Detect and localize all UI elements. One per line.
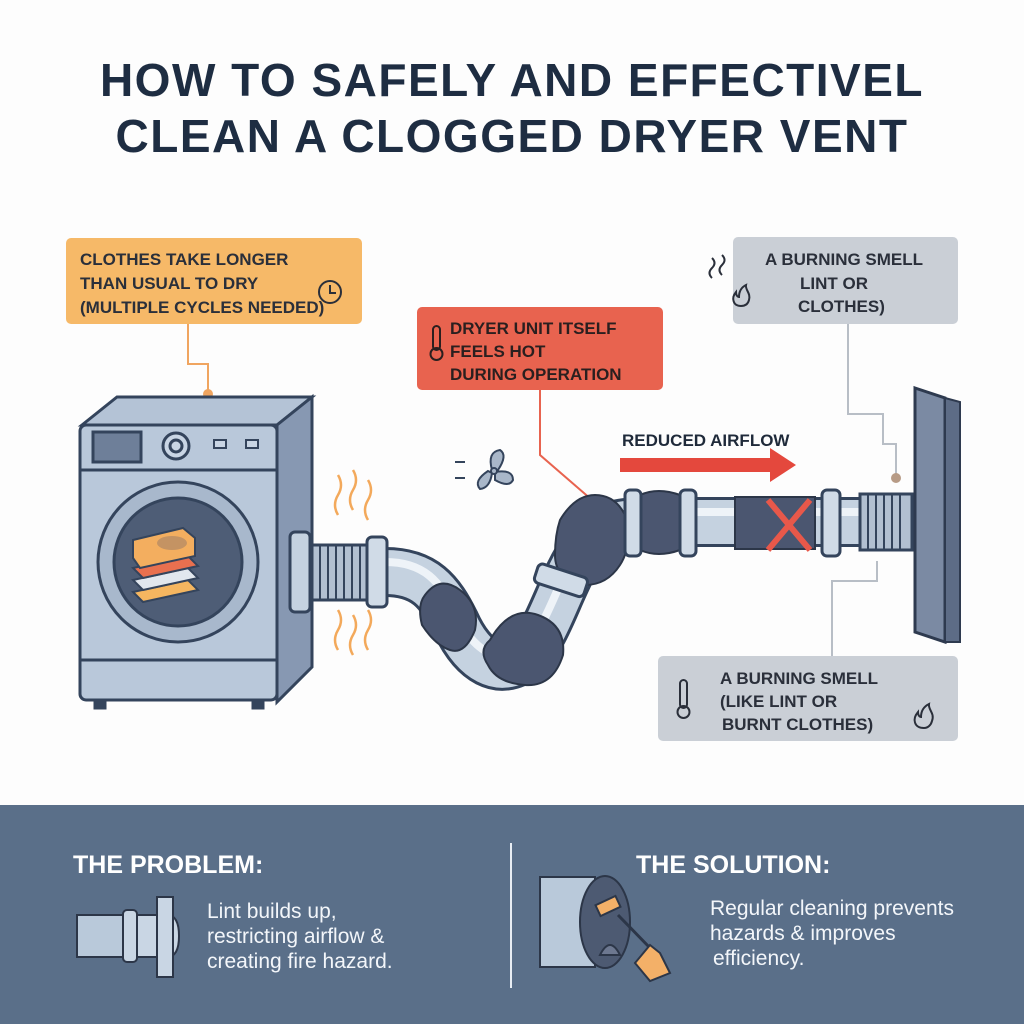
text: problem: creating fire hazard. bbox=[207, 950, 393, 973]
washing machine bbox=[80, 397, 312, 708]
text: problem bbox=[207, 900, 393, 973]
text: problem: restricting airflow & bbox=[207, 925, 384, 948]
icon: fan bbox=[455, 450, 513, 489]
title bbox=[100, 54, 924, 162]
callout: clothes take longer: CLOTHES TAKE LONGER bbox=[80, 250, 288, 269]
heading: the problem: THE PROBLEM: bbox=[73, 851, 263, 879]
title: CLEAN A CLOGGED DRYER VENT bbox=[116, 110, 908, 162]
callout: dryer feels hot: FEELS HOT bbox=[450, 342, 546, 361]
callout: dryer feels hot: DRYER UNIT ITSELF bbox=[450, 319, 617, 338]
icon: clogged pipe bbox=[77, 897, 179, 977]
callout: burning smell top: CLOTHES) bbox=[798, 297, 885, 316]
red X bbox=[768, 500, 810, 550]
callout: dryer feels hot bbox=[417, 307, 663, 506]
lint clogs bbox=[420, 491, 815, 685]
callout: burning smell bottom: BURNT CLOTHES) bbox=[722, 715, 873, 734]
heat waves bbox=[335, 470, 371, 655]
text: solution bbox=[710, 897, 954, 970]
callout: clothes take longer bbox=[66, 238, 362, 399]
callout: burning smell top bbox=[710, 237, 958, 483]
callout: burning smell bottom: (LIKE LINT OR bbox=[720, 692, 837, 711]
callout: burning smell top: LINT OR bbox=[800, 274, 868, 293]
text: solution: hazards & improves bbox=[710, 922, 896, 945]
text: problem: Lint builds up, bbox=[207, 900, 337, 923]
callout: burning smell bottom: A BURNING SMELL bbox=[720, 669, 878, 688]
callout: burning smell top: A BURNING SMELL bbox=[765, 250, 923, 269]
title: HOW TO SAFELY AND EFFECTIVEL bbox=[100, 54, 924, 106]
heading: the solution: THE SOLUTION: bbox=[636, 851, 830, 879]
text: solution: efficiency. bbox=[713, 947, 804, 970]
callout: clothes take longer: (MULTIPLE CYCLES NEEDED) bbox=[80, 298, 324, 317]
callout: burning smell bottom bbox=[658, 561, 958, 741]
wall plate bbox=[915, 388, 960, 642]
icon: cleaning brush bbox=[540, 876, 670, 981]
icon: clothes stack bbox=[133, 528, 198, 602]
arrow: reduced airflow bbox=[620, 431, 796, 482]
text: solution: Regular cleaning prevents bbox=[710, 897, 954, 920]
panel: problem / solution bbox=[0, 805, 1024, 1024]
callout: clothes take longer: THAN USUAL TO DRY bbox=[80, 274, 259, 293]
callout: dryer feels hot: DURING OPERATION bbox=[450, 365, 622, 384]
vent pipe bbox=[290, 490, 912, 685]
arrow: reduced airflow: REDUCED AIRFLOW bbox=[622, 431, 790, 450]
